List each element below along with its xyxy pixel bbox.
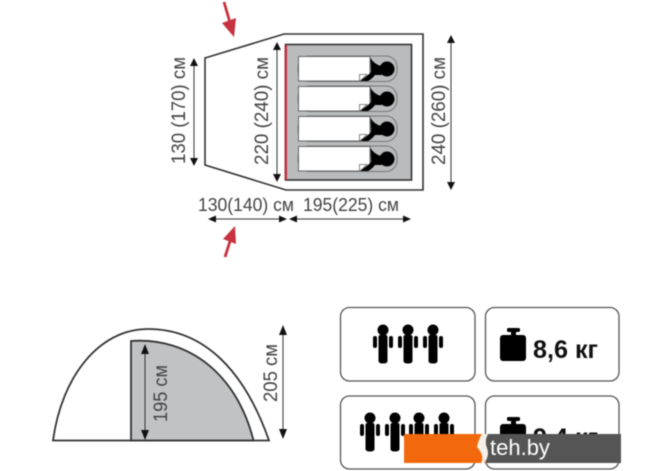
red arrow: top entrance <box>222 2 236 37</box>
watermark <box>404 434 621 463</box>
outer dome <box>53 329 269 440</box>
icon: persons <box>360 412 454 452</box>
panel: weight 8,6 kg <box>486 308 619 381</box>
dimension: inner height <box>141 344 172 440</box>
red door line <box>284 45 287 180</box>
dimension: vestibule length: 130(140) см <box>198 195 294 215</box>
sleeping bag 4 <box>298 146 397 172</box>
dimension: outer width <box>429 35 455 190</box>
dimension: outer height: 205 см <box>261 344 282 402</box>
watermark: teh.by <box>490 435 550 460</box>
panel: 3 persons <box>340 308 475 381</box>
dimension: outer height <box>261 325 287 439</box>
panel: weight 9,4 kg <box>486 396 619 469</box>
red arrow: bottom entrance <box>223 226 236 257</box>
panel: 4 persons <box>340 396 475 469</box>
icon: persons <box>373 324 443 364</box>
dimension: vestibule width: 130 (170) см <box>169 57 190 164</box>
dimension: inner width <box>252 42 281 182</box>
sleeping bag 2 <box>298 86 397 112</box>
inner tent floor <box>286 44 412 180</box>
vestibule and outer outline <box>205 34 423 190</box>
sleeping bag 3 <box>298 116 397 142</box>
dimension: inner width: 220 (240) см <box>252 57 273 165</box>
tent floor plan <box>205 34 423 190</box>
weight value: 9,4 кг <box>533 424 598 452</box>
dimension: inner height: 195 см <box>151 365 172 422</box>
tent side view <box>53 325 287 440</box>
weight value: 8,6 кг <box>533 336 598 364</box>
dimension: outer width: 240 (260) см <box>429 57 450 165</box>
dimension: inner length: 195(225) см <box>303 195 399 215</box>
sleeping bag 1 <box>298 56 397 82</box>
icon: weight <box>500 328 526 361</box>
icon: weight <box>500 417 526 450</box>
inner tent section <box>131 341 254 440</box>
dimension: inner length <box>289 195 411 222</box>
